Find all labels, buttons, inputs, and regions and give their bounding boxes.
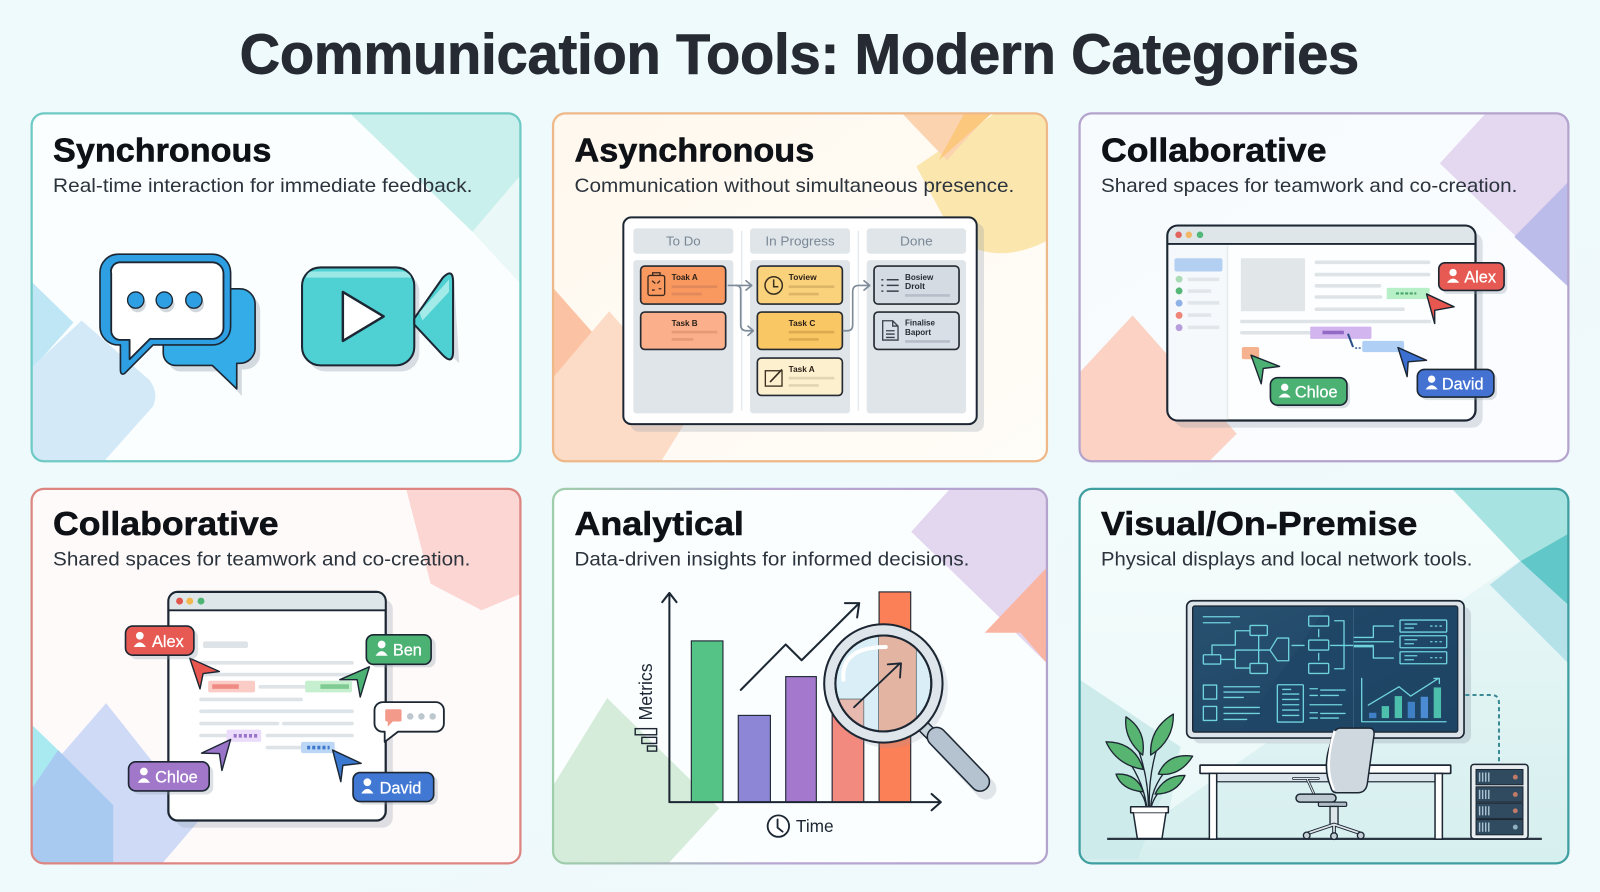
- user tag: Alex: [1427, 263, 1507, 324]
- column: Done: Baport: [905, 328, 931, 337]
- heading: Visual/On-Premise: Visual/On-Premise: [1101, 506, 1417, 543]
- user tag: David: [1398, 348, 1497, 400]
- heading: Collaborative: Collaborative: [53, 506, 279, 543]
- title: Communication Tools: Modern Categories: [240, 23, 1359, 86]
- user tag: Ben: [340, 635, 436, 697]
- column: In Progress: Task A: [789, 364, 815, 374]
- kanban board: [623, 217, 984, 432]
- axes: [662, 593, 941, 810]
- heading: Analytical: Analytical: [574, 506, 744, 543]
- user tag: Alex: [126, 626, 219, 689]
- user tag: Alex: Alex: [1464, 269, 1496, 287]
- server rack: [1471, 764, 1528, 839]
- arrows: task flow: [728, 281, 870, 335]
- user tag: Chloe: [129, 739, 231, 794]
- document rows: [1203, 685, 1345, 722]
- column: In Progress: Task C: [789, 318, 815, 328]
- heading: Synchronous: Synchronous: [53, 132, 271, 169]
- flow diagram: [1203, 616, 1393, 673]
- user tag: David: David: [1442, 375, 1484, 393]
- column: To Do: Toak A: [672, 272, 698, 282]
- description: Collaborative: Shared spaces for teamwork and co-creation.: [53, 548, 470, 570]
- floor line: [1107, 838, 1542, 840]
- speech bubble: [374, 702, 444, 742]
- column: In Progress: [750, 228, 850, 413]
- description: Synchronous: Real-time interaction for immediate feedback.: [53, 175, 472, 197]
- column: Done: Finalise: [905, 318, 936, 327]
- magnifying glass: [824, 624, 986, 789]
- heading: Collaborative: Collaborative: [1101, 132, 1327, 169]
- axis label: time: Time: [796, 816, 834, 836]
- bar chart: [635, 592, 986, 837]
- panel: synchronous: [32, 113, 520, 461]
- desk: [1200, 765, 1451, 839]
- heading: Asynchronous: Asynchronous: [574, 132, 814, 169]
- icon: chat bubbles: [100, 254, 260, 396]
- panel: analytical: [553, 489, 1047, 863]
- user tag: David: [333, 750, 438, 805]
- user tag: Chloe: Chloe: [155, 769, 198, 787]
- axis label: time: [768, 815, 834, 837]
- column: To Do: [633, 228, 733, 413]
- potted plant: [1106, 714, 1193, 838]
- user tag: Ben: Ben: [393, 642, 422, 660]
- icon: video camera: [302, 267, 459, 372]
- column: To Do: Task B: [672, 318, 698, 328]
- panel: asynchronous: [553, 113, 1047, 461]
- user tag: Chloe: [1251, 355, 1350, 408]
- description: Analytical: Data-driven insights for informed decisions.: [574, 548, 969, 570]
- column: In Progress: In Progress: [765, 234, 835, 249]
- mini chart: [1362, 678, 1446, 722]
- trend arrow: [741, 603, 859, 690]
- column: Done: [867, 228, 966, 413]
- document window: [126, 592, 444, 828]
- column: Done: Bosiew: [905, 273, 934, 282]
- description: Asynchronous: Communication without simultaneous presence.: [574, 175, 1014, 197]
- description: Visual/On-Premise: Physical displays and local network tools.: [1101, 548, 1472, 570]
- bars: [691, 592, 911, 802]
- office chair: [1293, 728, 1374, 839]
- column: Done: Drolt: [905, 282, 925, 291]
- column: In Progress: Toview: [789, 272, 817, 282]
- dashed network cable: [1465, 695, 1499, 763]
- panel: collaborative (bottom): [32, 489, 520, 863]
- column: To Do: To Do: [666, 234, 701, 249]
- server list: [1400, 620, 1447, 664]
- axis label: metrics: [635, 663, 657, 751]
- column: Done: Done: [900, 234, 933, 249]
- wall display: [1187, 601, 1471, 743]
- axis label: metrics: Metrics: [635, 663, 656, 720]
- panel: visual / on-premise: [1080, 489, 1568, 863]
- description: Collaborative: Shared spaces for teamwork and co-creation.: [1101, 175, 1517, 197]
- app window: [1167, 226, 1507, 428]
- user tag: Chloe: Chloe: [1295, 384, 1338, 402]
- user tag: David: David: [380, 779, 421, 797]
- panel: collaborative (top): [1080, 113, 1568, 461]
- user tag: Alex: Alex: [152, 633, 184, 651]
